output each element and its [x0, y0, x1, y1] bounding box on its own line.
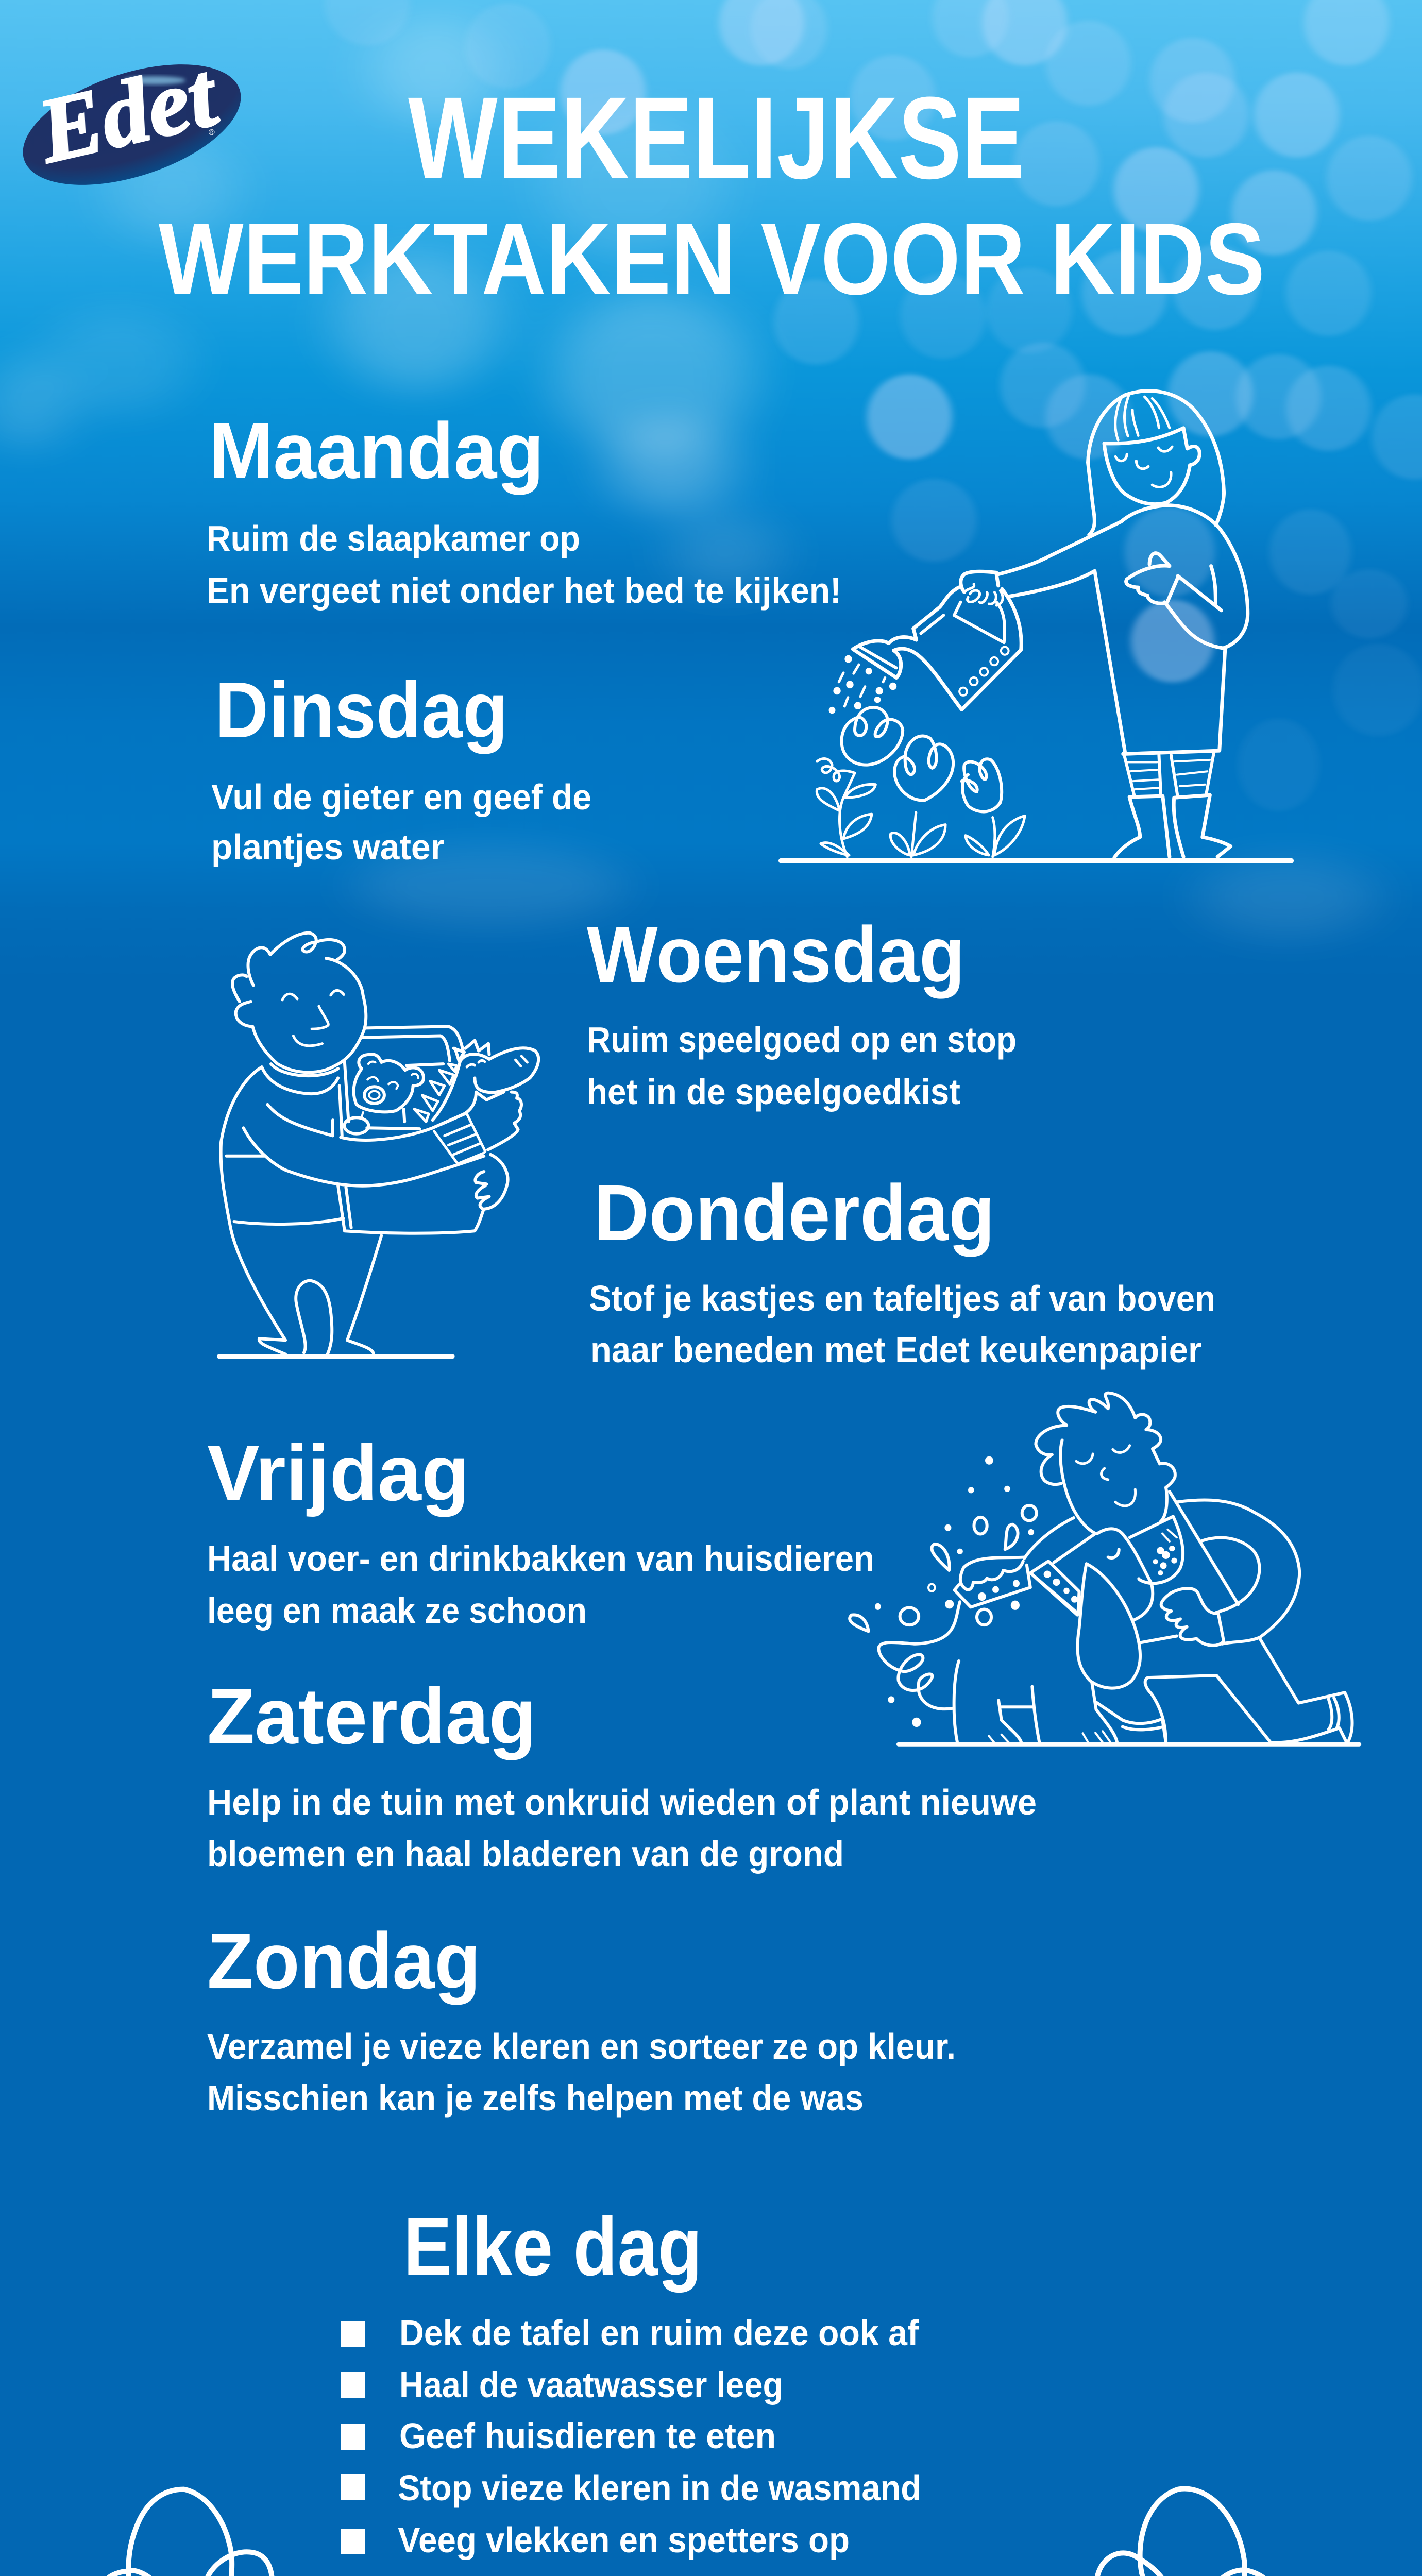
boy head	[1036, 1393, 1175, 1534]
body and dress	[998, 505, 1248, 648]
flowers	[841, 707, 903, 765]
left part: flower, line, sock, onesie, t-shirt, rabbit	[100, 2489, 735, 2576]
text block: Woensdag: het in de speelgoedkist	[587, 1072, 960, 1112]
hair	[1088, 391, 1224, 535]
collar	[262, 1064, 338, 1094]
text block: Dinsdag: plantjes water	[211, 827, 444, 867]
text block: Vrijdag: leeg en maak ze schoon	[207, 1590, 587, 1631]
title	[159, 73, 1265, 316]
text block: Dinsdag: Dinsdag	[215, 666, 508, 754]
teddy bear	[354, 1054, 424, 1112]
right flower	[1097, 2489, 1275, 2576]
text block: Dinsdag: Vul de gieter en geef de	[211, 777, 591, 817]
heading: Elke dag: Elke dag	[403, 2200, 702, 2293]
bubbles and drops	[1022, 1505, 1037, 1521]
title: WERKTAKEN VOOR KIDS	[159, 202, 1265, 316]
sleeve band	[1030, 1561, 1079, 1615]
text block: Donderdag: Donderdag	[594, 1168, 995, 1257]
checklist: elke dag: Stop vieze kleren in de wasmand	[398, 2468, 921, 2508]
text block: Zaterdag: Zaterdag	[207, 1672, 536, 1760]
text block: Vrijdag: Haal voer- en drinkbakken van huisdieren	[207, 1538, 874, 1579]
sponge hand	[955, 1557, 1030, 1607]
hands	[475, 1092, 521, 1209]
text block: Vrijdag	[207, 1429, 874, 1631]
text block: Zondag: Verzamel je vieze kleren en sorteer ze op kleur.	[207, 2026, 956, 2066]
illustration: girl watering flowers	[781, 391, 1291, 861]
text block: Zaterdag: Help in de tuin met onkruid wieden of plant nieuwe	[207, 1782, 1037, 1822]
toy dino	[433, 1041, 538, 1120]
sleeve stripes	[434, 1114, 485, 1164]
boy legs and shoes	[1092, 1639, 1352, 1742]
logo: Edet oval	[8, 41, 256, 209]
dog ear and head	[1077, 1529, 1153, 1688]
text block: Maandag	[207, 406, 841, 611]
text block: Woensdag: Woensdag	[587, 910, 965, 999]
text block: Woensdag: Ruim speelgoed op en stop	[587, 1020, 1017, 1060]
legs and boots	[1124, 753, 1214, 798]
head	[232, 933, 366, 1072]
text block: Zaterdag: bloemen en haal bladeren van de grond	[207, 1834, 844, 1874]
illustration: boy with toy box	[219, 933, 538, 1357]
checklist: elke dag	[341, 2313, 921, 2576]
pointing hand	[1126, 553, 1178, 603]
text block: Zondag: Misschien kan je zelfs helpen met de was	[207, 2078, 864, 2118]
checklist: elke dag: Dek de tafel en ruim deze ook af	[399, 2313, 919, 2353]
text block: Maandag: Ruim de slaapkamer op	[207, 518, 580, 558]
ground line	[899, 1742, 1359, 1747]
illustration: boy washing dog	[850, 1393, 1359, 1744]
ground line	[781, 858, 1291, 863]
text block: Maandag: En vergeet niet onder het bed te kijken!	[207, 570, 841, 611]
text block: Maandag: Maandag	[209, 406, 544, 495]
watering can	[853, 587, 1021, 709]
body and legs	[221, 1067, 484, 1354]
right part: basket, boy, flower	[616, 2489, 1275, 2576]
checklist: elke dag: Geef huisdieren te eten	[399, 2416, 776, 2456]
text block: Vrijdag: Vrijdag	[207, 1429, 469, 1517]
plants	[817, 759, 875, 857]
text block: Donderdag: Stof je kastjes en tafeltjes af van boven	[589, 1278, 1215, 1318]
face	[1104, 428, 1199, 504]
text block: Zondag: Zondag	[207, 1917, 481, 2005]
hand on can	[961, 571, 998, 592]
boy shirt dots and fingers	[1162, 1530, 1177, 1541]
checklist: elke dag: Haal de vaatwasser leeg	[399, 2365, 783, 2405]
text block: Woensdag	[587, 910, 1017, 1112]
toy box	[338, 1026, 484, 1233]
text block: Donderdag: naar beneden met Edet keukenpapier	[590, 1330, 1201, 1370]
water drops	[839, 665, 885, 706]
boy body and arm	[1024, 1492, 1299, 1644]
text block: Donderdag	[589, 1168, 1215, 1370]
text block: Zondag	[207, 1917, 956, 2118]
logo: Edet oval: Edet	[28, 42, 227, 182]
text block: Dinsdag	[211, 666, 591, 867]
ground line	[219, 1354, 452, 1359]
checklist: elke dag: Veeg vlekken en spetters op	[398, 2520, 850, 2560]
title: WEKELIJKSE	[408, 73, 1025, 204]
illustration: washing line scene	[65, 2489, 1299, 2576]
logo: Edet oval: ®	[209, 128, 215, 137]
left flower	[100, 2489, 272, 2576]
text block: Zaterdag	[207, 1672, 1037, 1874]
